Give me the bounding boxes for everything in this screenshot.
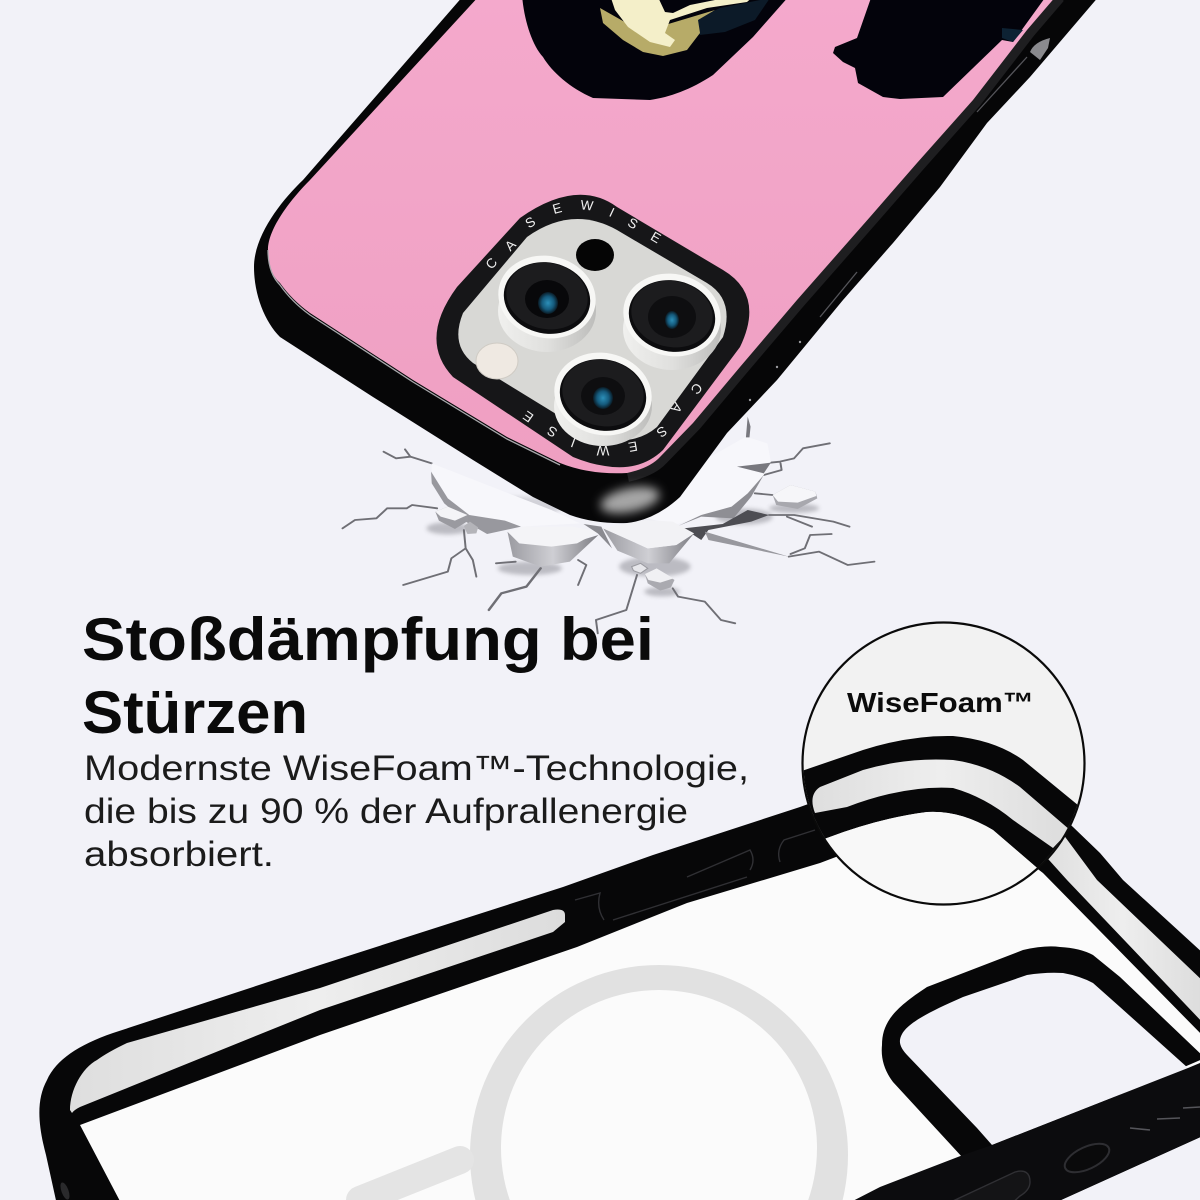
clear back panel	[80, 810, 1200, 1200]
rock fragment left	[435, 507, 478, 534]
wisefoam label: WiseFoam™	[847, 687, 1034, 718]
side buttons	[575, 830, 815, 920]
disc outline	[802, 622, 1084, 904]
casewise lettering on camera bezel: S	[625, 215, 640, 232]
sensor hole	[576, 239, 614, 271]
wedge crack	[705, 532, 789, 557]
casewise lettering on camera bezel: A	[668, 400, 685, 416]
casewise lettering on camera bezel: S	[522, 214, 538, 231]
left raised plate	[432, 463, 580, 527]
camera cutout frame	[882, 946, 1200, 1158]
heading	[82, 606, 654, 746]
heading: Stürzen	[82, 679, 308, 746]
body text: Modernste WiseFoam™-Technologie,	[84, 749, 749, 788]
camera island bezel	[436, 195, 749, 467]
clear gap right	[1040, 830, 1200, 1025]
cracked floor impact	[342, 417, 874, 633]
bumper	[254, 0, 1100, 523]
rock fragment right	[773, 485, 817, 509]
chunk centre left	[507, 527, 598, 567]
lens bottom	[547, 344, 659, 446]
flash	[476, 343, 518, 379]
magnified corner detail	[804, 736, 1078, 868]
port slot	[1061, 1138, 1113, 1178]
silver edge line	[268, 250, 560, 465]
side button highlight	[1030, 38, 1050, 60]
casewise lettering on camera bezel: I	[569, 435, 578, 450]
right raised plate	[644, 437, 771, 524]
casewise lettering on camera bezel: A	[502, 237, 519, 254]
upper phone with pink case	[254, 0, 1100, 523]
bottom left port	[59, 1181, 71, 1200]
bumper inner ridge	[627, 0, 1057, 473]
centre split line	[583, 524, 612, 548]
left plate broken edge	[431, 472, 521, 534]
body text: absorbiert.	[84, 835, 274, 874]
soft shadows in the cracks	[426, 497, 819, 596]
magsafe alignment tab	[360, 1160, 460, 1200]
right plate broken edge	[678, 475, 764, 526]
black print shape with cream figure	[522, 0, 790, 100]
casewise lettering on camera bezel: E	[551, 200, 563, 217]
casewise lettering on camera bezel: W	[580, 197, 594, 214]
casewise lettering on camera bezel: S	[545, 423, 560, 440]
bumper bottom highlight	[598, 482, 662, 518]
sharp shards	[737, 417, 771, 473]
lower phone clear case	[39, 760, 1200, 1200]
body text	[84, 749, 749, 874]
clear gap left	[70, 910, 565, 1113]
crack lines	[342, 443, 874, 633]
casewise lettering on camera bezel: W	[596, 443, 609, 458]
small fragments lower	[632, 563, 675, 591]
casewise lettering on camera bezel: C	[483, 255, 500, 272]
camera cutout opening	[900, 973, 1188, 1145]
bottom frame stripes	[1130, 1107, 1200, 1130]
disc background	[802, 622, 1084, 904]
casewise lettering on camera bezel: S	[654, 423, 670, 440]
wisefoam magnifier callout	[790, 622, 1090, 920]
camera plate	[458, 219, 727, 440]
chunk centre right	[603, 520, 694, 563]
casewise lettering on camera bezel: E	[648, 229, 663, 246]
casewise lettering on camera bezel: E	[520, 408, 536, 425]
bottom button	[955, 1171, 1030, 1200]
magsafe ring	[470, 965, 848, 1200]
casewise lettering on camera bezel: I	[607, 205, 617, 220]
lens right	[616, 265, 728, 370]
edge specks	[749, 341, 801, 401]
heading: Stoßdämpfung bei	[82, 606, 654, 673]
side button details	[820, 57, 1027, 317]
casewise lettering on camera bezel: C	[688, 380, 705, 397]
body text: die bis zu 90 % der Aufprallenergie	[84, 792, 688, 831]
black print shape right	[833, 0, 1047, 99]
casewise lettering on camera bezel: E	[627, 438, 639, 455]
lens top left	[491, 247, 603, 352]
bottom frame	[845, 1061, 1200, 1200]
dark crack opening	[683, 510, 769, 540]
black outer frame	[39, 760, 1200, 1200]
casewise lettering on camera bezel	[483, 197, 705, 458]
pink back	[268, 0, 1057, 473]
